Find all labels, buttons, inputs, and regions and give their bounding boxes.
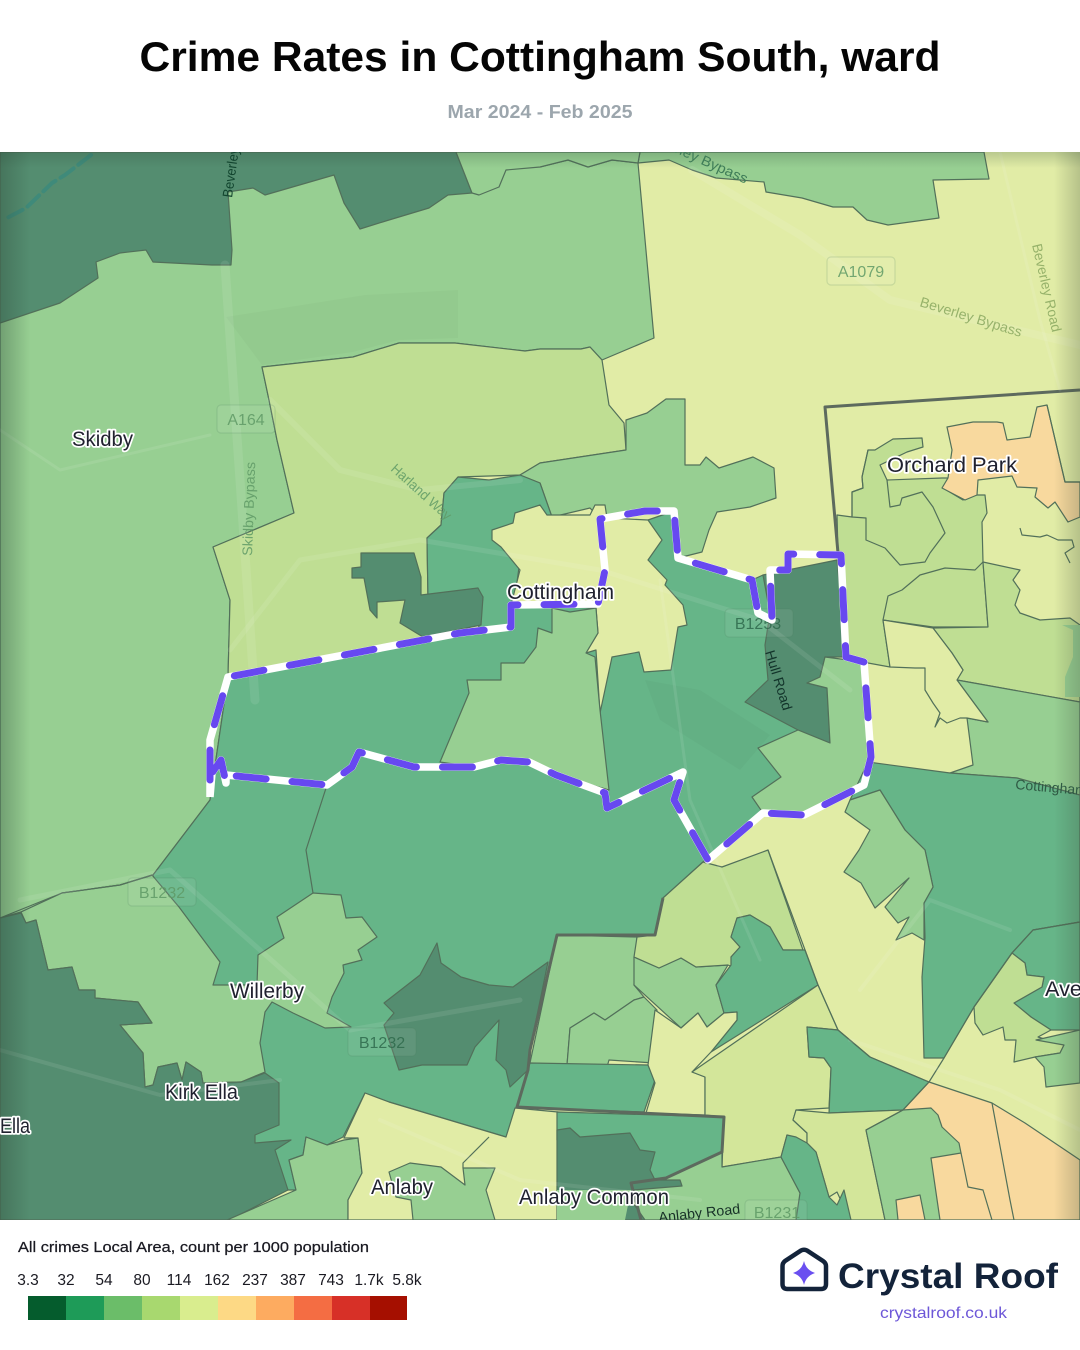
shade: field patch (226, 290, 458, 365)
legend values: 3.3 (17, 1272, 39, 1289)
area: east light strip (1062, 625, 1080, 697)
area: Anlaby Common mid green (557, 1112, 724, 1183)
area: central Cottingham yellow (492, 505, 687, 713)
area: bottom light green (631, 1152, 811, 1220)
area: west Cottingham mid green (427, 475, 552, 632)
road names: Anlaby Road (658, 1200, 741, 1225)
area: Anlaby divider (463, 1137, 489, 1168)
area: mid green south-east (807, 1027, 929, 1113)
place labels: Skidby (72, 428, 133, 451)
area: Orchard Park pale green (837, 438, 988, 667)
legend values (17, 1272, 422, 1289)
area: south light green diamond (634, 957, 728, 1028)
area: Orchard Park orange (942, 405, 1080, 522)
road names: Beverley (219, 147, 242, 198)
legend colour scale (28, 1296, 407, 1320)
area: Avenue pale green (974, 953, 1064, 1062)
legend values: 162 (204, 1272, 230, 1289)
place labels: Cottingham (507, 581, 614, 604)
area: lower east light green (1035, 1030, 1080, 1087)
legend values: 80 (133, 1272, 151, 1289)
area: Anlaby yellow (344, 1093, 558, 1220)
road shields: B1231 (754, 1205, 800, 1222)
area: western light green (0, 152, 654, 918)
place labels: Ave (1045, 978, 1080, 1001)
road shields: B1232 (139, 885, 185, 902)
area: east light green (950, 680, 1080, 800)
legend values: 387 (280, 1272, 306, 1289)
place labels: Orchard Park (887, 454, 1018, 477)
legend values: 114 (167, 1272, 192, 1289)
area boundary: west of south Cottingham (306, 785, 327, 893)
legend values: 1.7k (354, 1272, 384, 1289)
website: crystalroof.co.uk (880, 1305, 1008, 1322)
area: south Cottingham light green (440, 608, 609, 790)
road shields: B1232 (359, 1035, 405, 1052)
area: east ward light green (752, 657, 871, 815)
roads (0, 152, 1080, 1200)
title: Crime Rates in Cottingham South, ward (140, 33, 940, 80)
area: top light patch (456, 152, 640, 195)
area: east mid green (850, 762, 1080, 1058)
area: central dark (384, 943, 548, 1087)
place labels: Anlaby (371, 1176, 433, 1199)
area: north-east light green (638, 152, 989, 225)
ward boundary: Cottingham South (210, 511, 871, 860)
date range subtitle: Mar 2024 - Feb 2025 (448, 102, 632, 122)
area: south pale green (634, 850, 803, 968)
shade: rail corridor (645, 680, 770, 770)
place labels: Anlaby Common (519, 1186, 669, 1209)
thin interior boundaries (0, 405, 1080, 1130)
area: pale south (692, 985, 838, 1167)
legend values: 32 (57, 1272, 75, 1289)
road names: Skidby Bypass (239, 462, 258, 556)
place labels (0, 428, 1080, 1209)
area: main mid green (153, 511, 800, 1190)
area: east light spur (844, 790, 933, 940)
place labels: Willerby (230, 980, 304, 1003)
area: north Cottingham light green (520, 399, 776, 558)
road names: Beverley Road (1029, 242, 1065, 333)
legend (17, 1239, 422, 1320)
area: bottom light green near Anlaby (227, 1137, 362, 1220)
road shields (128, 257, 895, 1228)
area: Anlaby inner light green (389, 1163, 495, 1220)
area: Orchard Park yellow south (883, 620, 988, 727)
map vignette (0, 152, 1080, 1220)
road names: rley Bypass (673, 140, 751, 186)
area: orange bottom-right (900, 1082, 1080, 1220)
legend values: 237 (242, 1272, 268, 1289)
area: M strip (781, 1135, 851, 1220)
area: dark patch west of Cottingham (352, 553, 483, 637)
icon: house with star (782, 1250, 826, 1289)
place labels: Kirk Ella (165, 1081, 238, 1104)
area: Kirk Ella dark green (0, 913, 291, 1220)
area: small orange (896, 1195, 925, 1220)
area: Anlaby Common dark (557, 1128, 682, 1220)
road shields: B1253 (735, 616, 781, 633)
legend title: All crimes Local Area, count per 1000 population (18, 1239, 369, 1256)
area: Willerby light green (21, 875, 377, 1087)
road names (219, 140, 1080, 1225)
area: light green south-east block (866, 1108, 961, 1220)
area: central-west pale green (213, 343, 626, 677)
area: east pale green block (933, 562, 1080, 702)
road shields: A1079 (838, 264, 884, 281)
legend values: 743 (318, 1272, 344, 1289)
area: Anlaby Common label base (557, 1190, 631, 1220)
legend values: 54 (95, 1272, 113, 1289)
road names: Beverley Bypass (918, 294, 1024, 340)
road shields: A164 (227, 412, 265, 429)
area: yellow south (646, 1010, 737, 1115)
area: row mid green (517, 1063, 655, 1112)
area: north-west dark green (0, 152, 472, 323)
thick parish boundaries (517, 390, 1080, 1220)
area: Avenue mid green (1012, 922, 1080, 1030)
river (7, 155, 91, 218)
logo: Crystal Roof (782, 1250, 1058, 1322)
area: south L mid (567, 997, 657, 1067)
legend values: 5.8k (392, 1272, 422, 1289)
area: dark patch east ward (745, 560, 846, 743)
area: orange divider (992, 1103, 1014, 1220)
area: pale block (793, 1110, 903, 1220)
road names: Harland Way (388, 460, 455, 523)
place labels: Ella (0, 1115, 30, 1138)
wordmark: Crystal Roof (838, 1257, 1058, 1296)
area: A south L west (530, 935, 644, 1065)
road names: Hull Road (762, 648, 796, 712)
area: mid green south (711, 915, 818, 1052)
area: orange inner divider (961, 1153, 992, 1220)
